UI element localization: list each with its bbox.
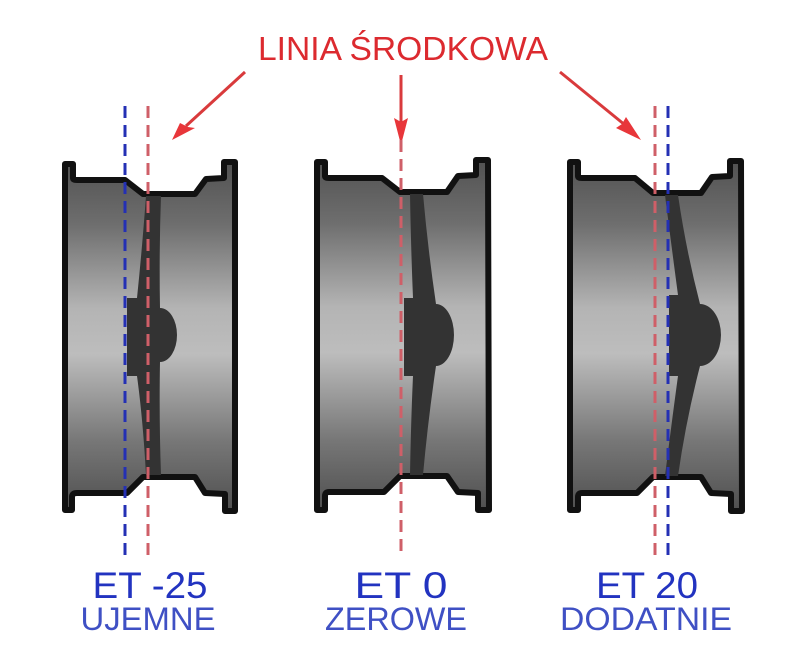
wheel: positive offset — [570, 161, 742, 511]
center line: middle wheel — [400, 140, 402, 555]
title: LINIA ŚRODKOWA — [258, 29, 548, 67]
label: ZEROWE: ZEROWE — [325, 601, 467, 637]
label: ET 20: ET 20 — [596, 565, 698, 606]
label: ET 0: ET 0 — [354, 565, 448, 606]
label: UJEMNE: UJEMNE — [80, 601, 216, 637]
center line: left wheel — [146, 106, 150, 555]
reference line: right wheel — [666, 106, 670, 555]
arrow: right — [560, 72, 641, 140]
wheel: negative offset — [65, 162, 235, 511]
wheel: zero offset — [317, 160, 489, 510]
label: DODATNIE: DODATNIE — [560, 601, 732, 637]
center line: right wheel — [654, 106, 656, 555]
reference line: left wheel — [124, 106, 126, 555]
label: ET -25: ET -25 — [92, 565, 208, 606]
arrow: left — [172, 72, 245, 140]
arrow: center — [394, 75, 408, 145]
